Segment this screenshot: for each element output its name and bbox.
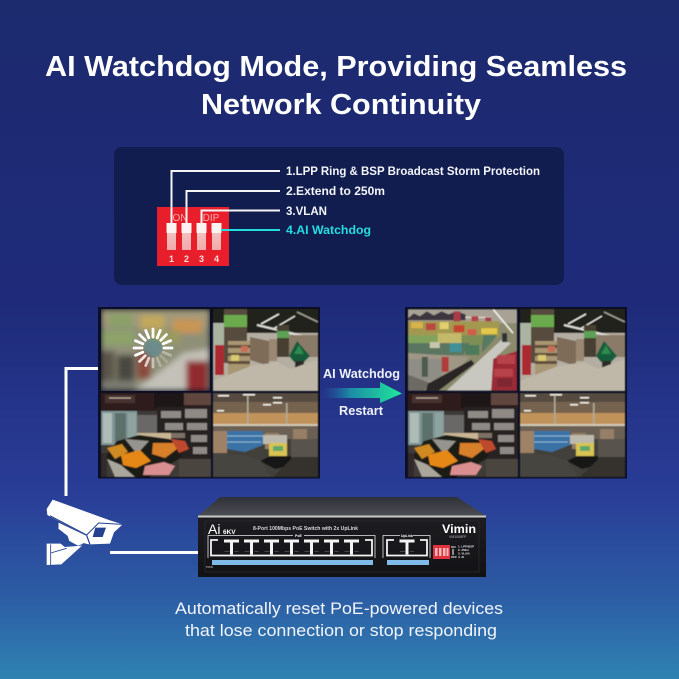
panel: video wall after restart <box>405 307 627 478</box>
caption: Automatically reset PoE-powered devices <box>175 599 503 618</box>
spinner hub blur <box>144 339 162 357</box>
brand labels: Ai <box>208 521 220 537</box>
uplink ports <box>383 536 430 565</box>
icon: loading spinner <box>134 329 172 367</box>
panel: video wall before restart <box>98 307 320 478</box>
mini DIP switch: ON <box>451 545 456 549</box>
icon: security camera <box>47 500 123 565</box>
switch front <box>198 517 486 577</box>
store feed 4 <box>212 392 319 478</box>
DIP switch block: 2 <box>184 254 189 264</box>
brand labels: Vimin <box>442 524 476 536</box>
title: Network Continuity <box>201 89 481 121</box>
setting labels: 1.LPP Ring & BSP Broadcast Storm Protection <box>286 164 540 178</box>
mini DIP switch <box>433 544 474 559</box>
DIP switch block: 1 <box>169 254 174 264</box>
store feed 2 <box>212 308 319 392</box>
title <box>45 51 627 121</box>
arrow: AI Watchdog restart: AI Watchdog <box>323 367 400 381</box>
DIP switch block: 3 <box>199 254 204 264</box>
caption: that lose connection or stop responding <box>185 621 497 640</box>
PoE ports <box>208 536 375 565</box>
mini DIP switch: OFF <box>451 555 457 559</box>
mini DIP switch: 3. VLAN <box>458 552 470 556</box>
setting labels: 3.VLAN <box>286 204 327 218</box>
DIP switch block: 4 <box>214 254 219 264</box>
connector lines <box>172 171 280 230</box>
brand labels: 8-Port 100Mbps PoE Switch with 2x UpLink <box>253 526 358 532</box>
mini DIP switch: 1. LPP/BSP <box>458 544 474 548</box>
DIP switch block: ON <box>172 213 188 224</box>
caption <box>175 599 503 640</box>
store feed 4 <box>519 392 626 478</box>
store feed 3 <box>407 392 518 478</box>
brand labels <box>206 521 476 569</box>
brand labels: 6KV <box>223 529 236 536</box>
brand labels: PoE <box>295 534 302 538</box>
arrow: AI Watchdog restart <box>322 367 402 418</box>
brand labels: PWR <box>206 565 214 569</box>
mini DIP switch: 4. AI <box>458 555 464 559</box>
blurred feed with loading spinner <box>101 309 210 391</box>
brand labels: VM1008FP <box>449 535 467 539</box>
setting labels: 2.Extend to 250m <box>286 184 385 198</box>
store feed 1 restored <box>407 308 518 392</box>
brand labels: UpLink <box>401 534 413 538</box>
connection lines: camera to screen and switch <box>66 368 198 552</box>
store feed 3 <box>100 392 212 478</box>
mini DIP switch: 2. 250m <box>458 548 469 552</box>
setting labels: 4.AI Watchdog <box>286 223 371 237</box>
DIP switch block <box>157 207 229 266</box>
panel: DIP switch settings <box>114 147 564 285</box>
store feed 2 <box>519 308 626 392</box>
switch top <box>198 497 486 516</box>
DIP switch block: DIP <box>203 213 220 224</box>
title: AI Watchdog Mode, Providing Seamless <box>45 51 627 83</box>
arrow: AI Watchdog restart: Restart <box>339 404 384 418</box>
PoE switch device <box>198 497 486 577</box>
setting labels <box>286 164 540 237</box>
